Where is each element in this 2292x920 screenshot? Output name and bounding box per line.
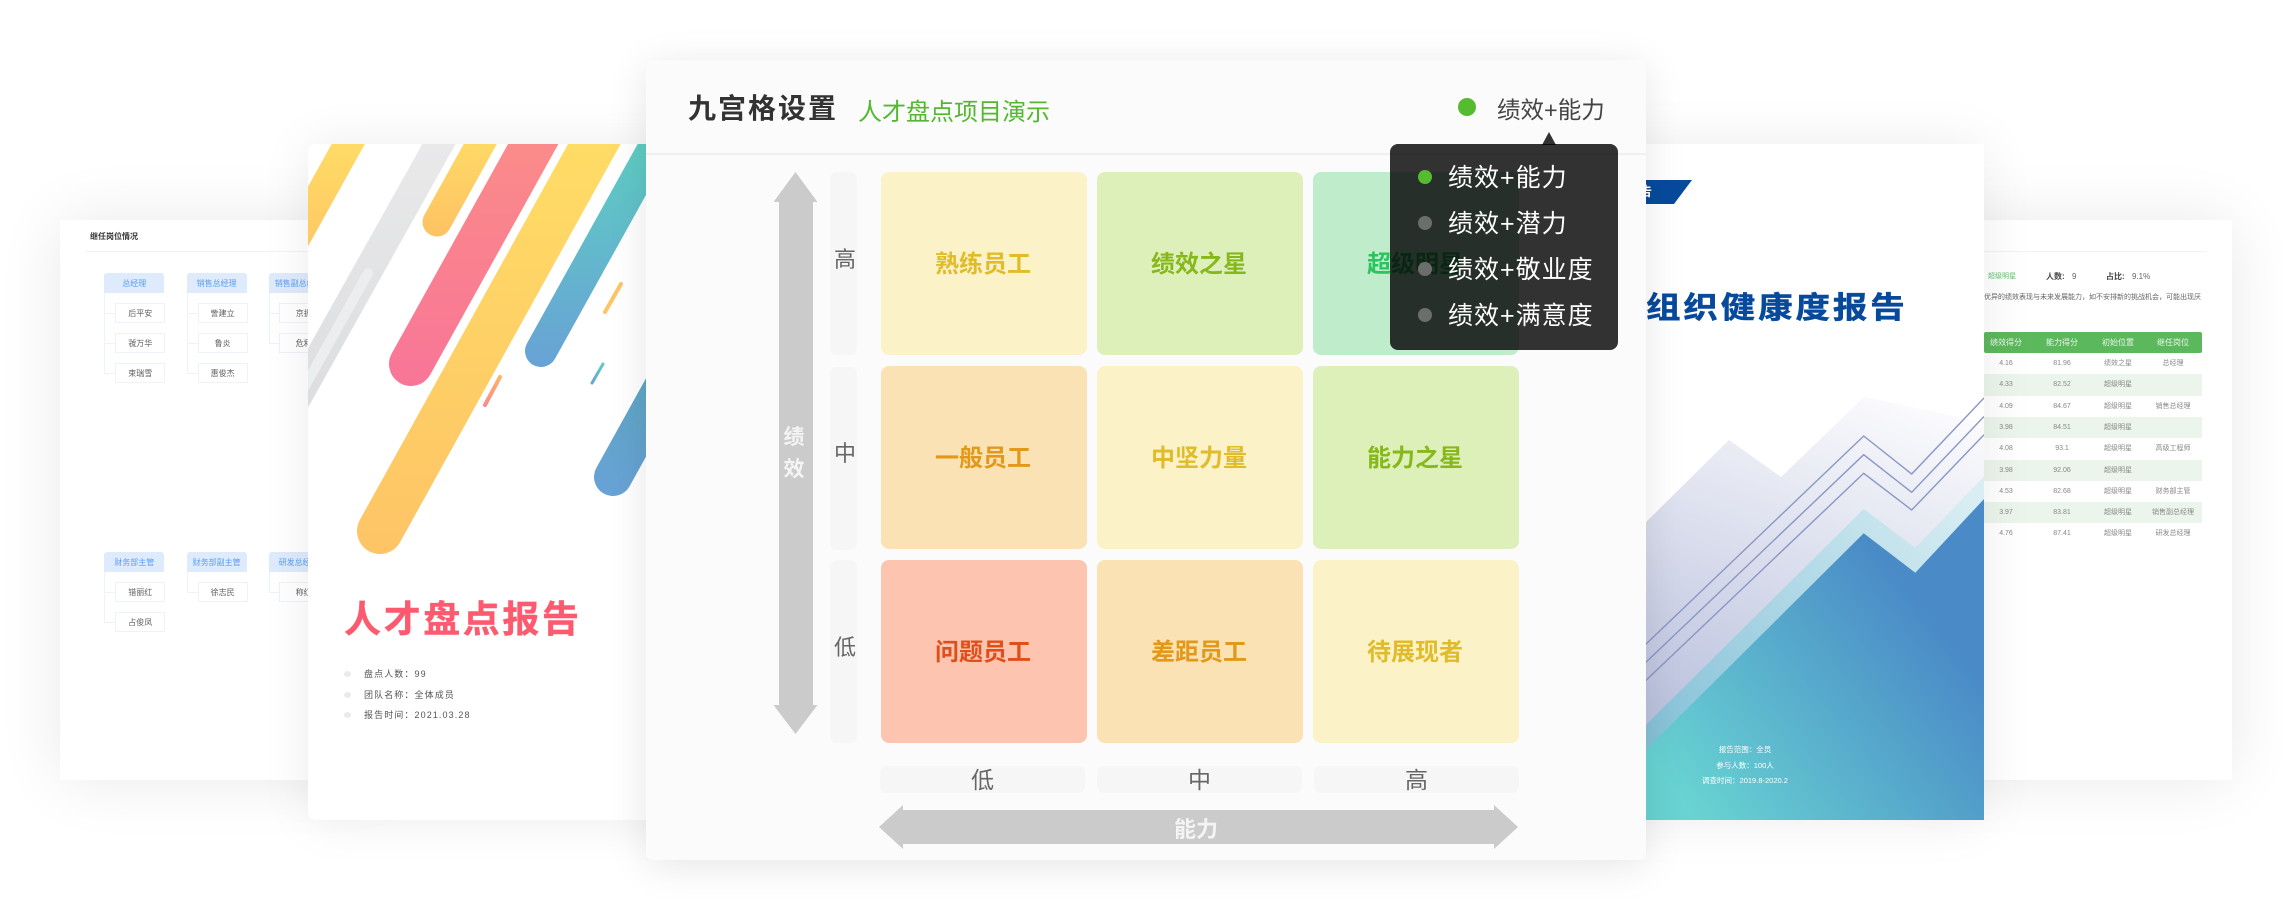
org group: general manager: 后平安	[128, 309, 152, 318]
cell: problem employee: 问题员工	[935, 639, 1031, 666]
org group: R&D general manager: 称红	[296, 588, 312, 597]
bar: gray	[280, 94, 467, 428]
org group: finance supervisor: 错丽红	[128, 588, 152, 597]
table: star employees: 84.67	[2053, 403, 2071, 410]
cell: gap employee: 差距员工	[1151, 639, 1247, 666]
table: star employees: 93.1	[2055, 445, 2069, 452]
dash: orange	[605, 284, 621, 312]
arrow: performance axis	[774, 172, 818, 734]
org group: general manager: 总经理	[122, 279, 146, 288]
summary: category, count and share: 9	[2072, 272, 2076, 281]
summary: category, count and share: 超级明星	[1988, 273, 2016, 280]
table: star employees: 超级明星	[2104, 445, 2132, 452]
cell: performance star	[1097, 172, 1303, 355]
info list: report meta: 盘点人数：99	[364, 669, 427, 679]
bar: short yellow	[437, 94, 508, 222]
org group: sales general manager: 惠俊杰	[211, 369, 235, 378]
info: report scope: 调查时间：2019.8-2020.2	[1702, 776, 1788, 785]
org group: sales general manager: 訾建立	[211, 309, 235, 318]
table: star employees: 3.98	[1999, 424, 2013, 431]
table: star employees: 高级工程师	[2156, 445, 2190, 452]
column label: low	[880, 766, 1085, 793]
cell: average employee	[881, 366, 1087, 549]
cell: super star: 超级明星	[1367, 251, 1463, 278]
bar: yellow far left	[280, 94, 376, 267]
org group: deputy sales manager: 京振	[296, 309, 312, 318]
org group: general manager: 虢万华	[128, 339, 152, 348]
org group: R&D general manager: 研发总经理	[279, 558, 319, 567]
axis label: performance: 绩	[784, 426, 804, 449]
table: star employees: 4.53	[1999, 488, 2013, 495]
panel: talent review report cover	[308, 144, 708, 820]
column label: medium	[1097, 766, 1302, 793]
table: star employees: 81.96	[2053, 360, 2071, 367]
row label: high	[830, 172, 857, 355]
table: star employees: 超级明星	[2104, 381, 2132, 388]
heading: succession positions: 继任岗位情况	[90, 232, 138, 240]
panel: nine-box settings	[646, 60, 1646, 860]
table: star employees: 87.41	[2053, 530, 2071, 537]
table: star employees: 82.68	[2053, 488, 2071, 495]
cell: super star	[1313, 172, 1519, 355]
option: performance + potential: 绩效+潜力	[1448, 210, 1568, 238]
org group: deputy sales manager: 销售副总经理	[275, 279, 323, 288]
table: star employees: 超级明星	[2104, 488, 2132, 495]
cell: gap employee	[1097, 560, 1303, 743]
summary: category, count and share	[1988, 272, 2150, 281]
table: star employees: 研发总经理	[2156, 530, 2190, 537]
panel: succession table report	[1900, 220, 2232, 780]
illustration: rising mountain chart	[1646, 398, 1984, 820]
table: star employees: 超级明星	[2104, 424, 2132, 431]
bar: pink	[411, 94, 561, 364]
table: star employees: 财务部主管	[2156, 488, 2190, 495]
org group: deputy finance supervisor: 财务部副主管	[193, 558, 241, 567]
table: star employees: 83.81	[2053, 509, 2071, 516]
ribbon label: 调研报告	[1600, 184, 1652, 199]
column label: medium: 中	[1188, 767, 1211, 793]
summary: category, count and share: 占比:	[2106, 272, 2125, 281]
org group: deputy finance supervisor	[187, 552, 248, 602]
org group: sales general manager	[187, 273, 248, 383]
cell: problem employee	[881, 560, 1087, 743]
option: performance + engagement: 绩效+敬业度	[1448, 256, 1594, 284]
panel: succession positions report	[60, 220, 390, 780]
zigzag lines	[1600, 398, 1984, 724]
arrow: ability axis	[879, 805, 1518, 849]
cell: performance star: 绩效之星	[1151, 251, 1247, 278]
table: star employees: 超级明星	[2104, 530, 2132, 537]
org group: deputy finance supervisor: 徐志民	[211, 588, 235, 597]
summary: category, count and share: 人数:	[2046, 272, 2065, 281]
info list: report meta	[344, 669, 471, 720]
light mountain	[1560, 397, 1984, 820]
table: star employees: 超级明星	[2104, 509, 2132, 516]
info: report scope: 参与人数：100人	[1716, 761, 1774, 770]
table: star employees: 3.97	[1999, 509, 2013, 516]
cell: core force: 中坚力量	[1151, 445, 1247, 472]
org group: general manager	[104, 273, 165, 383]
row label: high: 高	[834, 246, 856, 272]
table: star employees: 92.06	[2053, 466, 2071, 474]
tag: blue ribbon	[1646, 180, 1692, 204]
cell: average employee: 一般员工	[935, 445, 1031, 472]
column label: low: 低	[971, 767, 994, 793]
pale teal mountain	[1560, 476, 1984, 820]
axis label: performance: 效	[784, 458, 804, 481]
table: star employees: 超级明星	[2104, 403, 2132, 410]
heading: nine-box settings: 九宫格设置	[688, 93, 838, 124]
option: performance + ability: 绩效+能力	[1448, 164, 1568, 192]
org group: sales general manager: 销售总经理	[197, 279, 237, 288]
table: star employees: 超级明星	[2104, 466, 2132, 474]
title: organizational health report: 组织健康度报告	[1646, 292, 1908, 324]
table: star employees: 销售副总经理	[2152, 509, 2194, 516]
cell: ability star: 能力之星	[1367, 445, 1463, 472]
org group: R&D general manager	[269, 552, 319, 602]
description text: 优异的绩效表现与未来发展能力，如不安排新的挑战机会，可能出现厌	[1984, 294, 2201, 301]
table: star employees: 4.76	[1999, 530, 2013, 537]
subheading: demo project: 人才盘点项目演示	[858, 99, 1050, 126]
info list: report meta: 报告时间：2021.03.28	[364, 710, 471, 720]
bar: lower blue	[613, 284, 720, 477]
table: star employees: 4.33	[1999, 381, 2013, 388]
row label: low	[830, 560, 857, 743]
row label: medium	[830, 367, 857, 550]
dash: teal	[592, 364, 603, 383]
table: star employees	[1984, 332, 2202, 537]
table: star employees: 3.98	[1999, 466, 2013, 474]
cell: skilled employee	[881, 172, 1087, 355]
table: star employees: 4.16	[1999, 360, 2013, 367]
table: star employees: 4.09	[1999, 403, 2013, 410]
selector: active metric: 绩效+能力	[1497, 97, 1605, 123]
org group: deputy sales manager	[269, 273, 323, 353]
table: star employees: 84.51	[2053, 424, 2071, 431]
row label: low: 低	[834, 634, 856, 660]
table header: 继任岗位	[2157, 338, 2189, 347]
org group: finance supervisor: 占俊凤	[128, 618, 152, 627]
row label: medium: 中	[834, 440, 856, 466]
table: star employees: 绩效之星	[2104, 360, 2132, 367]
column label: high	[1314, 766, 1519, 793]
info: report scope	[1702, 745, 1788, 785]
illustration: diagonal rounded bars	[308, 144, 646, 554]
option: performance + satisfaction: 绩效+满意度	[1448, 302, 1594, 330]
cell: under-performer: 待展现者	[1367, 639, 1463, 666]
table: star employees: 4.08	[1999, 445, 2013, 452]
panel: organizational health report cover	[1560, 144, 1984, 820]
table header: 初始位置	[2102, 338, 2134, 347]
org group: finance supervisor	[104, 552, 165, 632]
table: star employees: 总经理	[2162, 360, 2184, 367]
bar: long yellow	[380, 94, 622, 531]
tooltip: metric dropdown	[1390, 132, 1618, 350]
org group: general manager: 束瑞雪	[128, 369, 152, 378]
cell: skilled employee: 熟练员工	[935, 251, 1031, 278]
cell: ability star	[1313, 366, 1519, 549]
info: report scope: 报告范围：全员	[1719, 745, 1771, 754]
title: talent review report: 人才盘点报告	[344, 598, 582, 640]
axis label: ability: 能力	[1174, 816, 1218, 842]
org group: deputy sales manager: 危利	[296, 339, 312, 348]
table: star employees: 82.52	[2053, 381, 2071, 388]
cell: core force	[1097, 366, 1303, 549]
cell: under-performer	[1313, 560, 1519, 743]
column label: high: 高	[1405, 767, 1428, 793]
org group: sales general manager: 鲁炎	[215, 339, 231, 348]
table header	[1984, 332, 2202, 353]
table header: 绩效得分	[1990, 338, 2022, 347]
main blue mountain	[1560, 499, 1984, 835]
table header: 能力得分	[2046, 338, 2078, 347]
table: star employees: 销售总经理	[2156, 403, 2190, 410]
dash: coral	[485, 377, 500, 405]
bar: teal blue	[541, 90, 686, 351]
info list: report meta: 团队名称：全体成员	[364, 690, 455, 700]
axis label: performance	[784, 426, 804, 481]
org group: finance supervisor: 财务部主管	[114, 558, 154, 567]
summary: category, count and share: 9.1%	[2132, 272, 2150, 281]
